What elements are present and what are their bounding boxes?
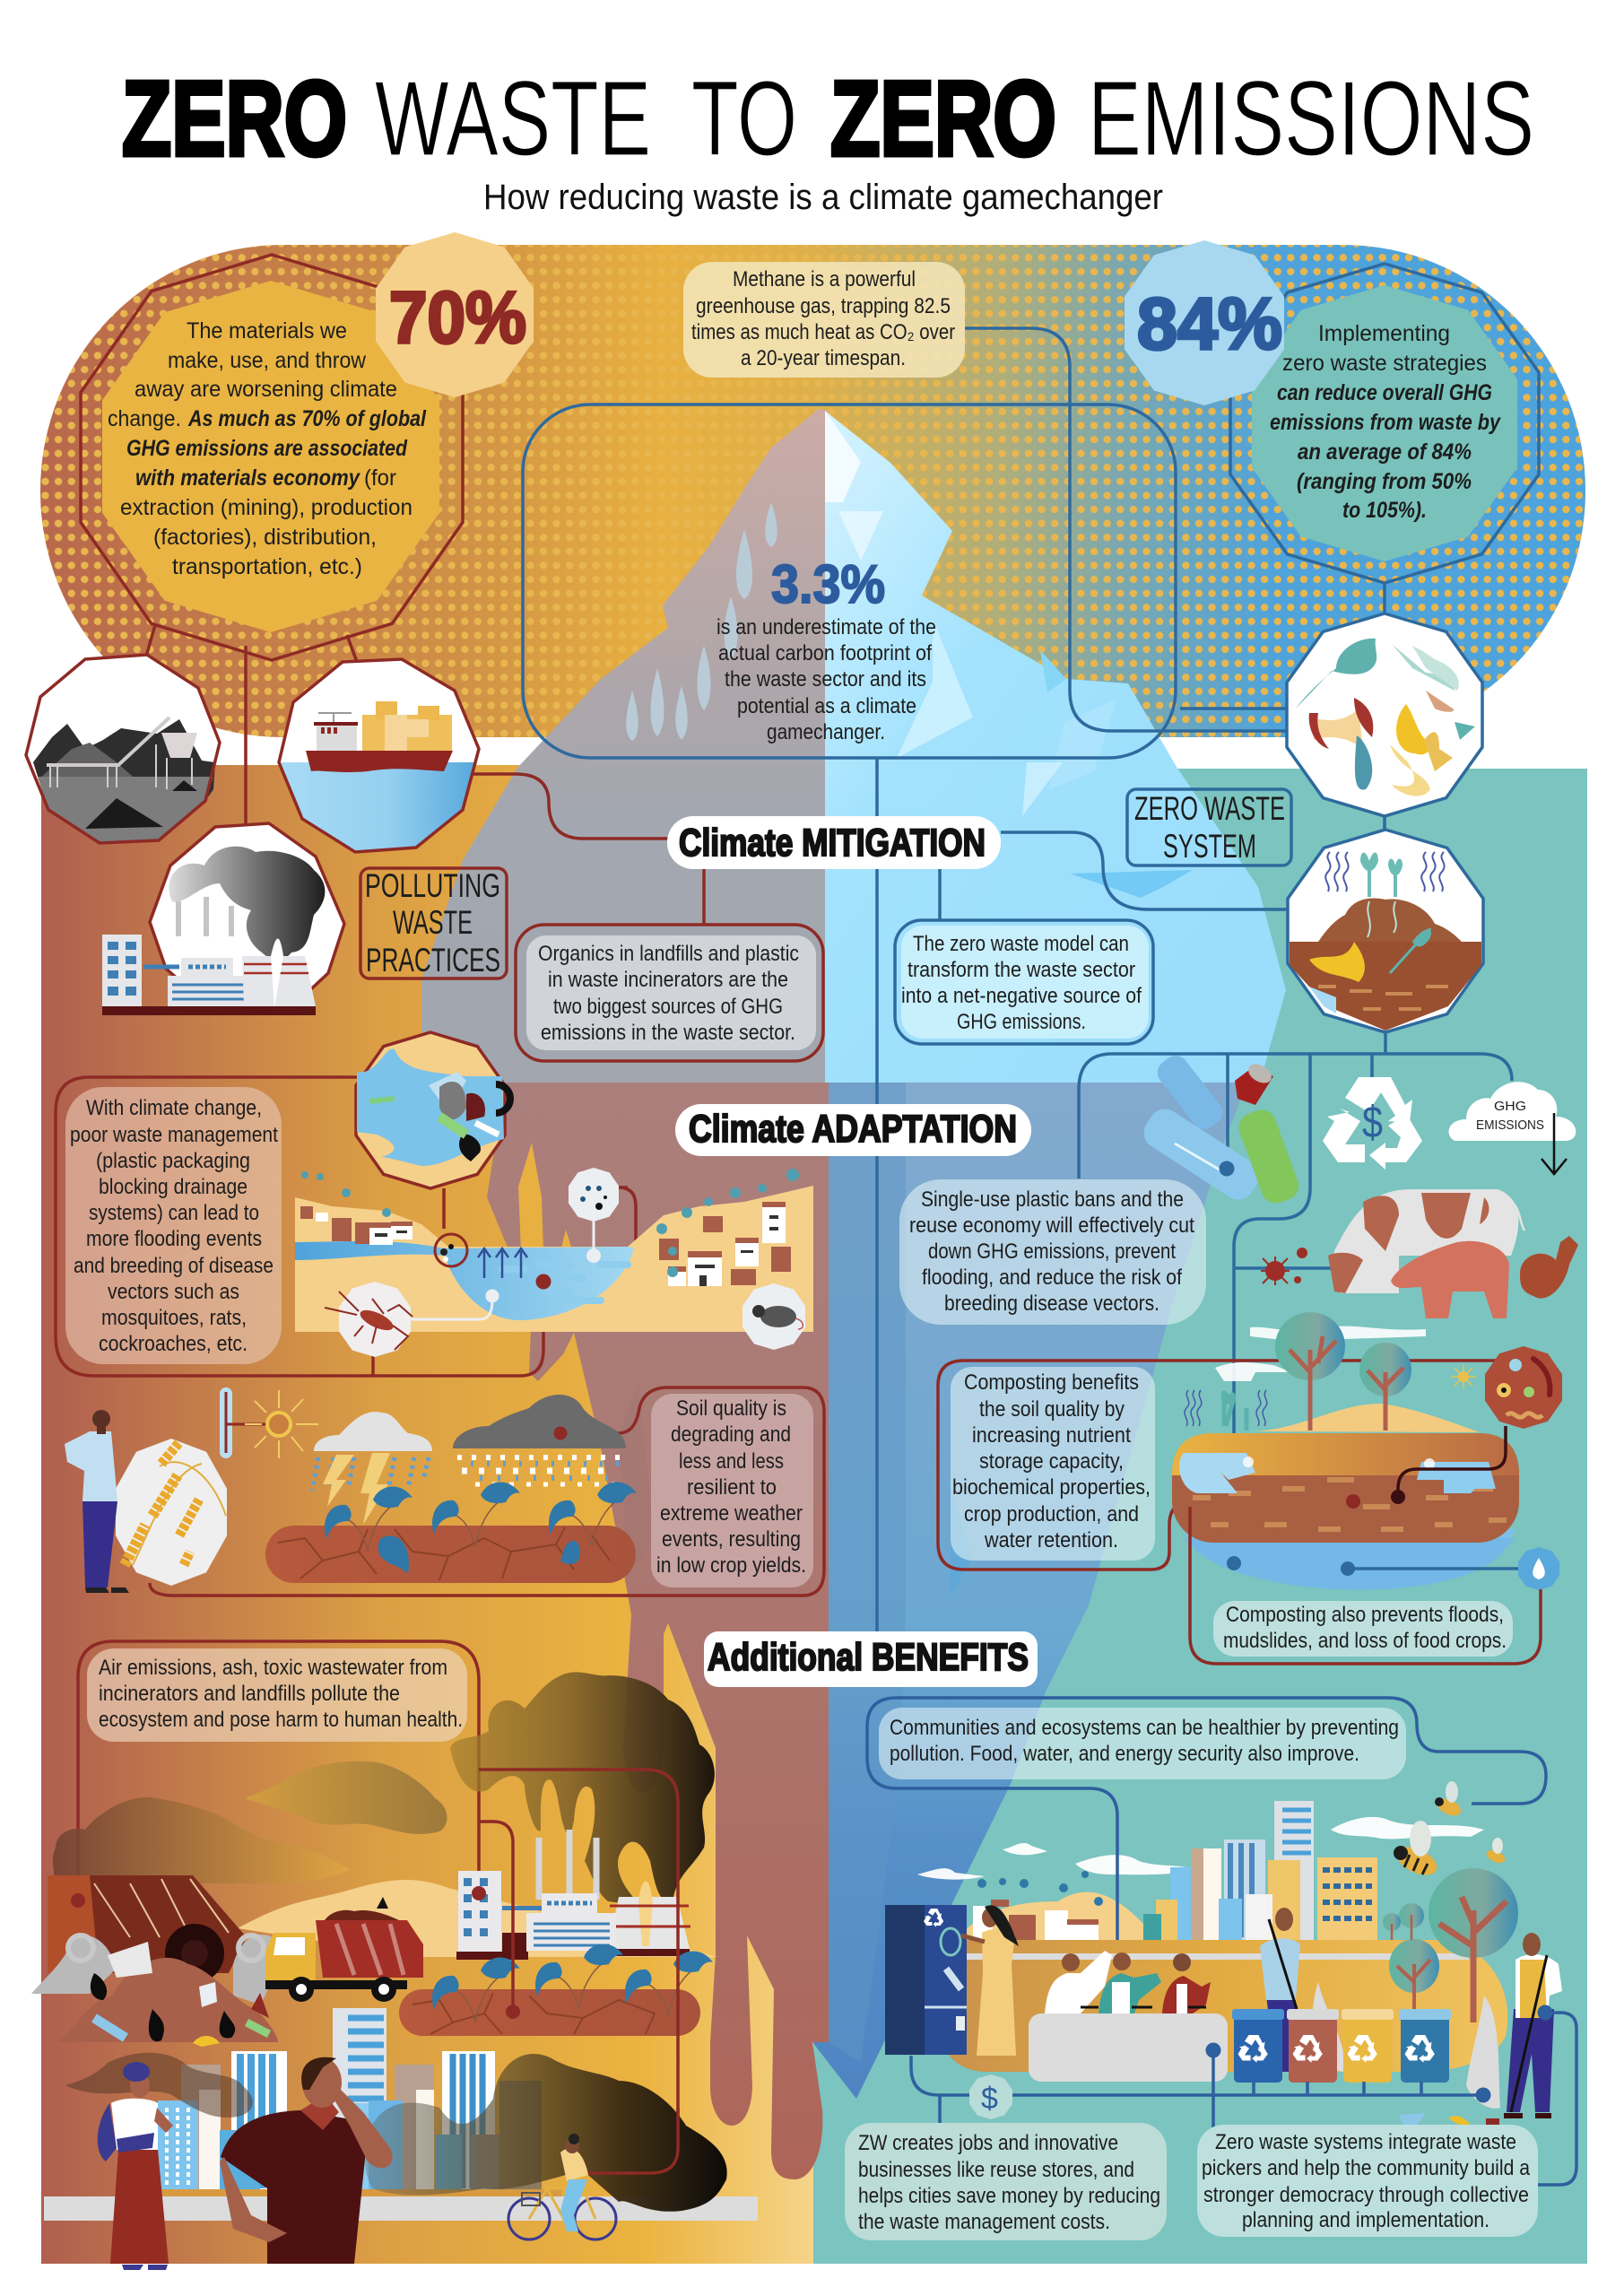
icon: food waste <box>1287 613 1482 816</box>
illustration: incinerator factory <box>456 1830 690 1960</box>
callout: flooding: blocking drainage <box>99 1175 248 1199</box>
callout: jobs: ZW creates jobs and innovative <box>858 2131 1118 2155</box>
icon: recycling dollar: $ <box>1362 1097 1383 1147</box>
title: ZERO <box>830 59 1056 178</box>
callout: net negative: into a net-negative source of <box>901 984 1142 1008</box>
badge: 84%: 84% <box>1137 283 1282 365</box>
title: ZERO <box>122 59 347 178</box>
callout: jobs <box>845 2123 1167 2240</box>
icon: reverse vending machine <box>885 1905 967 2055</box>
text block: materials economy <box>108 318 427 579</box>
callout: democracy: Zero waste systems integrate waste <box>1215 2130 1516 2154</box>
callout: pollution: Air emissions, ash, toxic wastewater from <box>99 1656 447 1680</box>
callout: composting benefits: storage capacity, <box>979 1449 1124 1474</box>
callout: flooding: With climate change, <box>86 1096 262 1120</box>
text block: zero waste strategies <box>1270 321 1501 523</box>
icon: compost <box>1288 830 1483 1032</box>
markers: community dots <box>1205 2005 1553 2102</box>
illustration: degraded soil 2 <box>399 1944 713 2036</box>
connector: compost water <box>1227 1556 1521 1576</box>
callout: pollution: ecosystem and pose harm to human health. <box>99 1708 463 1732</box>
callout: methane: times as much heat as CO₂ over <box>691 320 955 344</box>
text block: 3.3%: is an underestimate of the <box>716 615 936 639</box>
panel: dotted top pill <box>40 245 1585 737</box>
illustration: sand hills <box>238 1880 717 1957</box>
icon: plastic blocking drainage <box>356 1032 510 1188</box>
callout: flood prevention <box>1190 1507 1541 1664</box>
callout: soil quality: Soil quality is <box>676 1396 786 1421</box>
callout: democracy: pickers and help the community build a <box>1202 2156 1531 2180</box>
connector: pollution links <box>479 1770 678 2173</box>
text block: materials economy: extraction (mining), production <box>120 495 413 520</box>
text block: 3.3%: actual carbon footprint of <box>718 641 932 665</box>
callout: single-use plastic: reuse economy will effectively cut <box>909 1213 1194 1238</box>
text block: zero waste strategies: Implementing <box>1318 321 1450 346</box>
illustration: farmer and wheat <box>65 1410 227 1593</box>
heading: additional benefits: Additional BENEFITS <box>708 1636 1029 1679</box>
marker: soil dot <box>506 2005 520 2019</box>
text block: 3.3%: gamechanger. <box>767 720 885 744</box>
callout: composting benefits: increasing nutrient <box>972 1423 1131 1448</box>
callout: flood prevention: mudslides, and loss of food crops. <box>1223 1629 1507 1653</box>
panel: 70 percent text <box>102 281 439 632</box>
callout: pollution: incinerators and landfills pollute the <box>99 1682 400 1706</box>
heading: climate adaptation: Climate ADAPTATION <box>689 1108 1017 1151</box>
badge: 70% <box>376 232 534 397</box>
connector: polluting side links <box>56 625 753 1376</box>
illustration: garbage truck <box>265 1897 423 2002</box>
figure: woman in yellow dress <box>961 1905 1019 2056</box>
callout: methane <box>683 262 965 378</box>
illustration: flooded town <box>295 1169 813 1332</box>
icon: GHG emissions cloud: GHG <box>1494 1099 1526 1114</box>
callout: organics sources: in waste incinerators are the <box>548 968 788 992</box>
iceberg adaptation: lower blue <box>812 1083 1260 2099</box>
text block: materials economy: The materials we <box>187 318 347 344</box>
text block: materials economy: (for <box>364 465 396 491</box>
icon: rat <box>743 1283 805 1350</box>
icon: blockage detail <box>435 1234 467 1266</box>
text block: zero waste strategies: zero waste strategies <box>1282 351 1487 376</box>
label: zero waste system: SYSTEM <box>1163 828 1256 865</box>
icon: recycling dollar <box>1323 1077 1422 1170</box>
callout: democracy: planning and implementation. <box>1242 2208 1489 2232</box>
callout: health: Communities and ecosystems can be healthier by preventing <box>890 1716 1399 1740</box>
icon: recycling bins <box>1232 2009 1451 2083</box>
illustration: young trees <box>1383 1868 1518 2022</box>
text block: zero waste strategies: emissions from waste by <box>1270 410 1501 435</box>
iceberg <box>421 409 1286 1083</box>
illustration: street smoke <box>65 2053 727 2212</box>
icon: dollar: $ <box>981 2082 998 2116</box>
panel: 84 percent text <box>1252 285 1517 561</box>
marker: flood dot <box>536 1274 551 1290</box>
callout: soil quality: in low crop yields. <box>656 1553 806 1578</box>
figure: waste picker 2 <box>1399 1933 1562 2127</box>
heading: climate mitigation: Climate MITIGATION <box>679 822 986 865</box>
icon: coal mine <box>26 655 220 843</box>
icon: GHG emissions cloud: EMISSIONS <box>1476 1118 1544 1133</box>
callout: single-use plastic: flooding, and reduce the risk of <box>922 1265 1182 1290</box>
badge: 70%: 70% <box>389 277 526 359</box>
figure: cyclist <box>508 2134 616 2239</box>
callout: flooding: mosquitoes, rats, <box>101 1306 247 1330</box>
callout: methane: greenhouse gas, trapping 82.5 <box>696 294 951 318</box>
callout: flooding: more flooding events <box>86 1227 262 1251</box>
text: 84% polygon outline <box>1230 264 1539 583</box>
illustration: plastic bottles <box>1138 1050 1303 1207</box>
illustration: livestock <box>1328 1189 1578 1318</box>
illustration: smoke clouds <box>53 1761 447 1883</box>
text block: zero waste strategies: an average of 84% <box>1298 439 1472 465</box>
illustration: hail cloud <box>453 1395 628 1484</box>
illustration: trees and clouds <box>1185 1312 1476 1431</box>
callout: flooding: systems) can lead to <box>89 1201 259 1225</box>
callout: soil quality: extreme weather <box>660 1501 803 1526</box>
text block: 3.3% <box>716 554 936 744</box>
text block: materials economy: transportation, etc.) <box>172 554 362 579</box>
panel: polluting side background <box>41 765 813 2264</box>
illustration: city skyline <box>44 2008 758 2221</box>
illustration: factory smoke plume <box>450 1672 715 1906</box>
label: polluting waste practices: WASTE <box>393 904 473 941</box>
icon: soil organisms <box>1485 1346 1562 1429</box>
callout: flooding: (plastic packaging <box>96 1149 250 1173</box>
connector: soil organisms <box>1398 1426 1506 1497</box>
callout: composting benefits: crop production, and <box>964 1502 1139 1526</box>
illustration: degraded soil <box>265 1482 637 1583</box>
callout: single-use plastic <box>899 1179 1206 1325</box>
text block: 3.3%: 3.3% <box>771 554 885 614</box>
title: WASTE <box>375 59 651 178</box>
text: 70% polygon outline <box>81 255 463 660</box>
heading: additional benefits <box>704 1631 1038 1687</box>
callout: pollution <box>78 1641 479 1900</box>
callout: soil quality: resilient to <box>687 1475 777 1500</box>
icon: cockroach <box>325 1282 499 1357</box>
callout: flooding: vectors such as <box>108 1280 239 1304</box>
figure: woman covering nose <box>98 2062 173 2270</box>
callout: organics sources: Organics in landfills and plastic <box>538 942 799 966</box>
illustration: storm cloud <box>312 1412 432 1525</box>
icon: thermometer and sun <box>220 1387 318 1458</box>
callout: methane: Methane is a powerful <box>733 267 916 291</box>
text block: zero waste strategies: can reduce overall GHG <box>1277 380 1492 405</box>
callout: flooding: cockroaches, etc. <box>99 1332 248 1356</box>
icon: cargo ship <box>279 659 479 852</box>
panel: zero waste side background <box>813 769 1587 2264</box>
callout: net negative <box>895 920 1153 1044</box>
icon: mosquitoes <box>569 1168 619 1263</box>
text block: 3.3%: potential as a climate <box>737 694 916 718</box>
text block: materials economy: (factories), distribution, <box>153 525 377 550</box>
callout: single-use plastic: breeding disease vectors. <box>944 1292 1159 1316</box>
callout: composting benefits: biochemical properties, <box>952 1475 1151 1500</box>
callout: organics sources <box>516 925 823 1061</box>
connector: jobs line <box>911 2013 1576 2185</box>
title: TO <box>691 59 797 178</box>
callout: composting benefits <box>938 1361 1500 1570</box>
icon: virus <box>1261 1248 1307 1285</box>
table <box>1029 2013 1228 2082</box>
label: polluting waste practices <box>360 867 507 978</box>
callout: organics sources: two biggest sources of GHG <box>553 995 783 1019</box>
callout: jobs: businesses like reuse stores, and <box>858 2158 1134 2182</box>
callout: soil quality: degrading and <box>671 1422 791 1447</box>
callout: composting benefits: the soil quality by <box>979 1397 1125 1422</box>
callout: single-use plastic: Single-use plastic bans and the <box>921 1187 1184 1212</box>
title <box>122 59 1534 178</box>
callout: composting benefits: water retention. <box>984 1528 1118 1552</box>
callout: soil quality <box>150 1387 824 1596</box>
badge: 84% <box>1125 240 1284 405</box>
iceberg adaptation: mauve melt with drips <box>487 1083 829 2179</box>
label: zero waste system: ZERO WASTE <box>1134 790 1285 827</box>
illustration: landfill <box>31 1875 278 2047</box>
text block: materials economy: make, use, and throw <box>168 348 367 373</box>
text block: materials economy: change. <box>108 406 181 431</box>
callout: jobs: the waste management costs. <box>858 2210 1110 2234</box>
figure: waste picker 1 <box>1260 1908 1344 2072</box>
illustration: clean city <box>917 1801 1507 2072</box>
text block: materials economy: with materials economy <box>135 465 360 491</box>
figure: panelists <box>1045 1951 1211 2013</box>
callout: net negative: transform the waste sector <box>908 958 1135 982</box>
callout: health <box>867 1698 1546 1940</box>
icon: bees <box>1393 1781 1507 1881</box>
text block: materials economy: away are worsening climate <box>135 377 397 402</box>
label: polluting waste practices: POLLUTING <box>365 867 500 904</box>
text block: materials economy: GHG emissions are associated <box>126 436 408 461</box>
callout: flooding: poor waste management <box>70 1123 278 1147</box>
icon: factory smoke <box>102 823 344 1015</box>
illustration: healthy soil <box>1172 1404 1519 1589</box>
callout: flooding: and breeding of disease <box>74 1254 274 1278</box>
icon: dollar <box>969 2074 1012 2119</box>
callout: net negative: The zero waste model can <box>913 932 1129 956</box>
connector: iceberg frame and zero waste links <box>523 328 1512 1637</box>
subtitle: How reducing waste is a climate gamechanger <box>483 178 1163 217</box>
icon: water drop <box>1518 1547 1559 1590</box>
callout: single-use plastic: down GHG emissions, prevent <box>928 1239 1176 1264</box>
text block: materials economy: As much as 70% of global <box>187 406 427 431</box>
label: polluting waste practices: PRACTICES <box>366 942 500 978</box>
text block: zero waste strategies: (ranging from 50% <box>1297 469 1472 494</box>
connector: mosquito to water <box>619 1186 628 1189</box>
callout: composting benefits: Composting benefits <box>964 1370 1139 1395</box>
icefall drops <box>626 502 777 741</box>
callout: flood prevention: Composting also prevents floods, <box>1226 1603 1504 1627</box>
callout: democracy: stronger democracy through collective <box>1203 2183 1529 2207</box>
label: zero waste system <box>1127 789 1291 865</box>
figure: man covering nose <box>220 2057 393 2264</box>
callout: soil quality: less and less <box>679 1449 784 1474</box>
icon: GHG emissions cloud <box>1449 1082 1576 1174</box>
callout: democracy <box>1197 2125 1538 2237</box>
callout: organics sources: emissions in the waste sector. <box>541 1021 795 1045</box>
connector: bottom smoke link <box>586 2108 678 2173</box>
text block: zero waste strategies: to 105%). <box>1342 498 1427 523</box>
callout: jobs: helps cities save money by reducing <box>858 2184 1160 2208</box>
callout: soil quality: events, resulting <box>662 1527 801 1552</box>
callout: net negative: GHG emissions. <box>957 1010 1086 1034</box>
callout: methane: a 20-year timespan. <box>741 346 906 370</box>
callout: flooding <box>65 1087 282 1364</box>
callout: health: pollution. Food, water, and energy security also improve. <box>890 1742 1359 1766</box>
text block: 3.3%: the waste sector and its <box>725 667 926 691</box>
heading: climate mitigation <box>667 816 1001 869</box>
